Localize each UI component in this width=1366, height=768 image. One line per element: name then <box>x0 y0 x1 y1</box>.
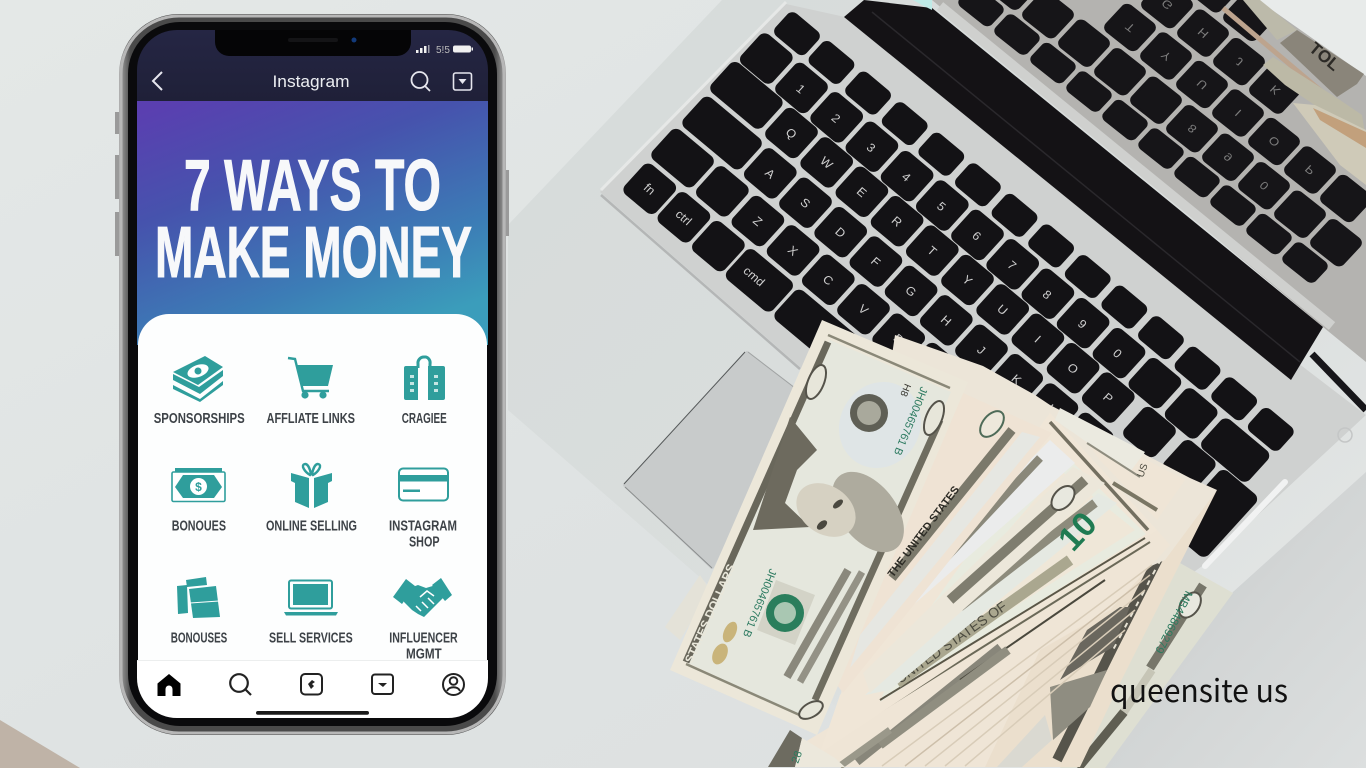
item: instagram shop: INSTAGRAM <box>389 518 457 534</box>
item: influencer mgmt: INFLUENCER <box>389 630 458 646</box>
heading <box>158 158 472 278</box>
reflected key letters: U <box>1194 77 1210 92</box>
pale bill shadow behind front bill <box>665 575 710 640</box>
lower cream fan stack <box>800 530 1170 767</box>
key legends: fn <box>641 181 658 198</box>
screen with keyboard reflection <box>932 0 1366 362</box>
pale fan bill five <box>865 493 1117 695</box>
item: sponsorships: SPONSORSHIPS <box>154 411 245 427</box>
key legends: cmd <box>740 264 768 289</box>
reflected key letters: H <box>1195 25 1211 41</box>
status bar <box>416 45 473 53</box>
heading: 7 WAYS TO <box>184 146 441 226</box>
laptop <box>508 0 1366 768</box>
app header <box>137 30 488 101</box>
icon: home <box>158 674 180 696</box>
keyboard keys <box>619 5 1309 625</box>
back chevron <box>153 72 162 90</box>
key legends: 4 <box>899 170 914 185</box>
icon: laptop <box>284 580 338 616</box>
key legends: J <box>974 343 988 357</box>
reflected key letters <box>1095 0 1346 207</box>
big cream bill: UNITED STATES OF <box>893 598 1010 686</box>
item: online selling: ONLINE SELLING <box>266 518 357 534</box>
back bill with beaded edge at upper right <box>1055 408 1185 520</box>
key legends: 9 <box>1075 317 1090 332</box>
bills at top right <box>1223 0 1366 185</box>
key legends: Y <box>959 273 975 288</box>
rightmost bill: MB44869279 <box>1152 589 1194 655</box>
key legends: T <box>924 243 940 259</box>
keyboard well <box>600 4 1366 640</box>
phone <box>115 14 509 735</box>
key legends: D <box>832 225 849 241</box>
black bezel <box>128 22 497 726</box>
white upper-right corner <box>1258 0 1366 76</box>
item: affiliate links <box>266 358 355 427</box>
key legends: 1 <box>793 82 808 96</box>
key legends: A <box>762 166 778 182</box>
key legends: X <box>785 243 801 259</box>
bottom nav background <box>137 660 488 718</box>
portrait bill <box>985 490 1217 767</box>
heading: MAKE MONEY <box>155 213 472 293</box>
pale fan bill three <box>845 440 1075 650</box>
reflected key letters: 9 <box>1221 150 1236 164</box>
icon: profile <box>443 674 464 695</box>
item: bonoues <box>172 468 226 534</box>
item: influencer mgmt <box>389 578 458 662</box>
key legends: P <box>1100 390 1116 406</box>
item: instagram shop <box>389 468 457 550</box>
reflected key letters: 8 <box>1185 121 1200 136</box>
front twenty-dollar bill: JH00465761 B <box>740 567 778 639</box>
hinge dark band <box>844 0 1323 380</box>
lower row <box>650 128 715 188</box>
treasury engraving <box>787 570 848 677</box>
key legends: 2 <box>828 111 843 126</box>
key legends: U <box>994 302 1010 318</box>
portrait face <box>786 472 866 548</box>
app title: Instagram <box>272 72 350 91</box>
item: sell services: SELL SERVICES <box>269 630 353 646</box>
icon: reels <box>301 674 322 694</box>
shaded desk at lower right <box>1100 472 1366 768</box>
key legends: S <box>797 195 813 211</box>
icon: stacked cards <box>177 577 220 618</box>
white content panel <box>138 314 487 660</box>
icon: shop <box>372 674 393 694</box>
corner 20 ovals <box>802 362 830 402</box>
key legends: B <box>891 331 906 347</box>
icon: cash stack <box>173 356 223 402</box>
pale bars behind green seal <box>757 580 815 645</box>
item: influencer mgmt: MGMT <box>406 646 442 662</box>
key legends: C <box>820 272 836 288</box>
key legends: M <box>960 389 977 406</box>
reflected key letters: Y <box>1158 48 1174 63</box>
gold 20 <box>709 619 740 667</box>
key legends: H <box>938 313 954 329</box>
teal glitch at top of hinge <box>913 0 932 10</box>
icon: tags <box>404 357 445 400</box>
reflected key letters: J <box>1232 55 1246 68</box>
key legends: 8 <box>1040 287 1054 302</box>
screen <box>137 29 488 718</box>
portrait coat <box>753 417 817 530</box>
portrait hair <box>818 459 918 565</box>
icon: shopping cart <box>288 358 333 399</box>
key legends: L <box>1044 402 1059 416</box>
key legends <box>641 52 1143 505</box>
item: bonouses: BONOUSES <box>171 630 228 646</box>
key legends: R <box>889 214 905 230</box>
key legends: N <box>925 360 942 376</box>
rightmost bill <box>1060 563 1233 768</box>
fan bill two with engraved strip: THE UNITED STATES <box>886 484 962 580</box>
reflected key letters: 0 <box>1257 178 1272 193</box>
bottom navigation <box>158 674 464 715</box>
number row <box>739 32 794 85</box>
item: sponsorships <box>154 356 245 427</box>
key legends: K <box>1009 372 1024 387</box>
key legends: F <box>868 254 883 269</box>
key legends: Z <box>750 214 766 229</box>
item: bonouses <box>171 577 228 646</box>
key legends: W <box>817 154 836 172</box>
item: bonoues: BONOUES <box>172 518 226 534</box>
black seal <box>850 394 888 432</box>
shop icon <box>454 73 472 90</box>
reflected keys on screen <box>957 0 1366 289</box>
phone frame <box>119 14 506 735</box>
icon: dollar bill: $ <box>195 480 202 494</box>
key legends: 7 <box>1004 258 1019 273</box>
bottom row <box>622 163 677 215</box>
key legends: 0 <box>1110 346 1125 361</box>
green seal <box>766 594 804 632</box>
pale fan bill four <box>863 467 1105 693</box>
edge text: STATES DOLLARS <box>682 562 738 665</box>
strip from under-bill at bottom <box>768 730 845 767</box>
function row <box>773 11 821 56</box>
reflected key letters: T <box>1123 20 1138 35</box>
icon: handshake <box>393 578 452 617</box>
key legends: V <box>855 302 872 318</box>
fan bill two with engraved strip <box>826 393 1052 693</box>
key legends: Q <box>783 125 799 142</box>
item: cragiee: CRAGIEE <box>402 411 447 427</box>
home indicator <box>256 711 369 715</box>
item: affiliate links: AFFLIATE LINKS <box>266 411 355 427</box>
reflected key letters: K <box>1267 82 1283 97</box>
power button mark <box>1338 428 1352 442</box>
green ten numeral: 10 <box>1051 505 1105 558</box>
front twenty-dollar bill: H8 <box>897 382 912 398</box>
key legends: I <box>1032 333 1044 345</box>
big cream bill <box>820 413 1157 753</box>
key legends: E <box>854 184 869 200</box>
camera <box>352 38 356 42</box>
item: sell services <box>269 580 353 646</box>
reflected key letters: O <box>1266 133 1283 149</box>
reflected key letters: I <box>1232 107 1244 119</box>
serial numbers: JH00465761 B <box>891 385 929 457</box>
search icon <box>412 72 430 91</box>
key legends: O <box>1064 360 1081 377</box>
strip from under-bill at bottom: 28 <box>790 749 805 765</box>
item: online selling <box>266 464 357 534</box>
key legends: 5 <box>934 199 949 214</box>
qwerty row <box>709 61 784 130</box>
status bar: 5!5 <box>436 45 450 56</box>
speaker <box>288 38 338 42</box>
phone buttons <box>115 112 121 134</box>
cash fan <box>665 320 1233 768</box>
notch <box>215 29 411 56</box>
banner gradient <box>137 101 488 345</box>
front twenty-dollar bill <box>670 320 968 735</box>
outer cream layer hiding keys under the fan <box>840 335 1217 700</box>
laptop body <box>508 0 1366 768</box>
key legends: G <box>902 283 919 300</box>
key legends: ctrl <box>673 207 695 228</box>
icon: search <box>230 674 251 695</box>
reflected key letters: P <box>1302 162 1318 177</box>
bills at top right: TOL <box>1305 39 1343 75</box>
fan strands <box>838 542 1152 766</box>
icon: gift box <box>291 464 332 508</box>
key legends: 6 <box>969 229 984 243</box>
trackpad <box>624 352 795 568</box>
corner: wooden object bottom left <box>0 720 80 768</box>
home row <box>681 96 763 170</box>
icon: credit card <box>399 468 448 500</box>
back bill with beaded edge at upper right: US <box>1135 462 1151 479</box>
key legends: 3 <box>864 140 878 155</box>
light watermark area <box>823 367 937 483</box>
watermark text: queensite us: queensite us <box>1110 666 1288 711</box>
item: instagram shop: SHOP <box>409 534 440 550</box>
item: cragiee <box>402 357 447 427</box>
